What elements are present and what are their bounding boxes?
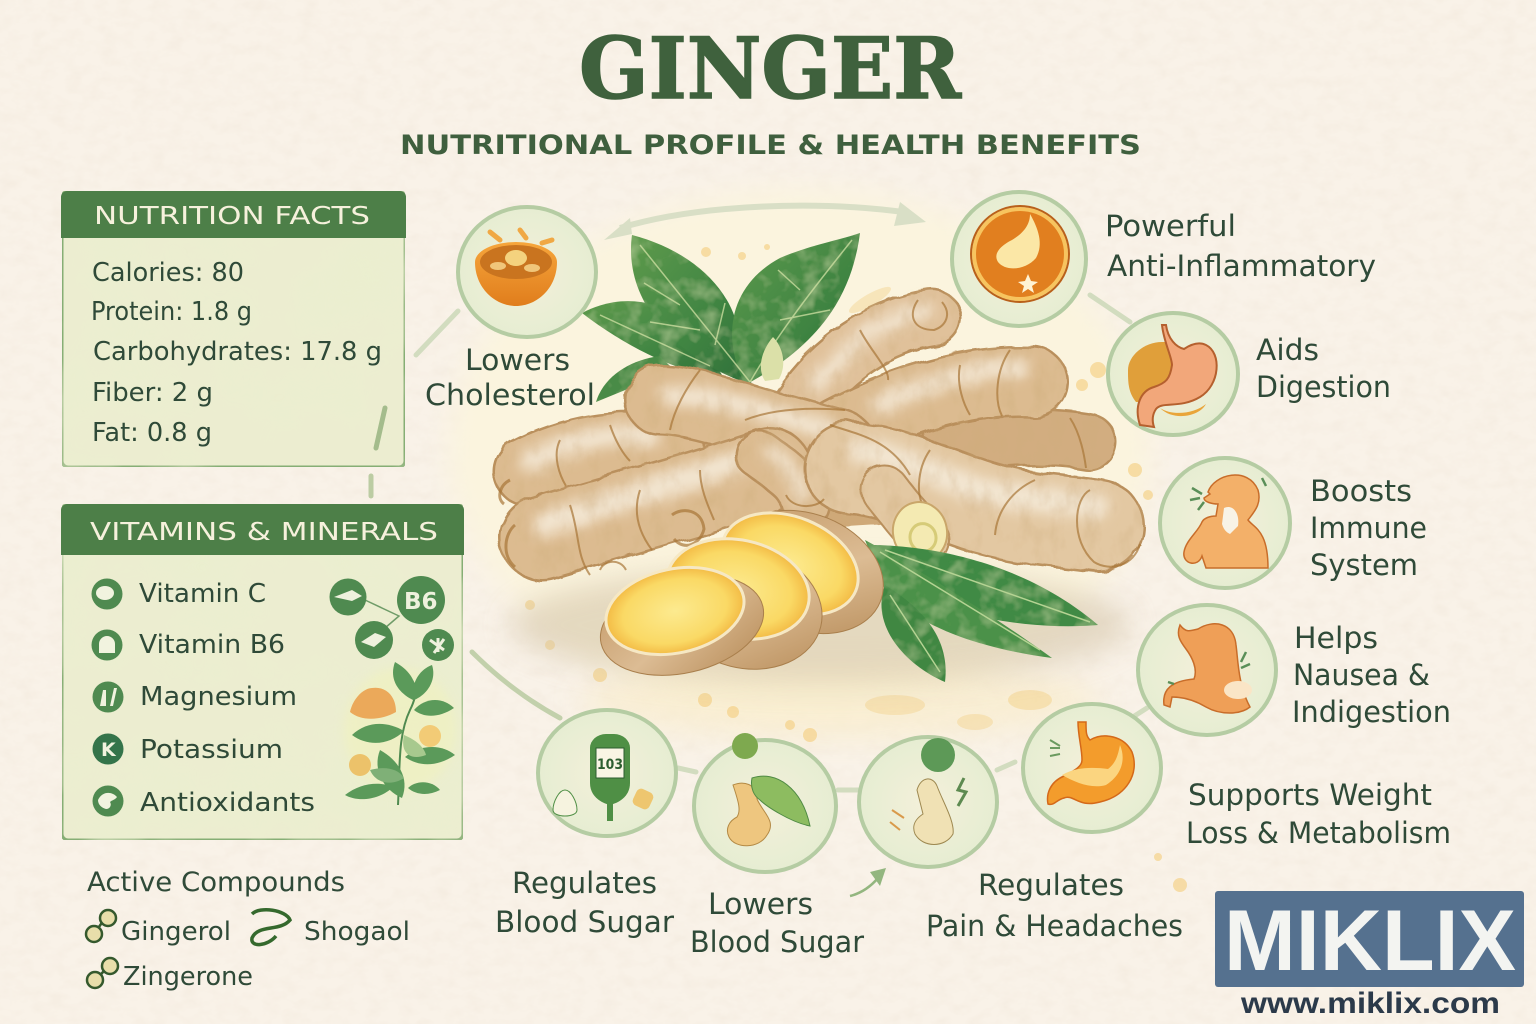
arrow: top arc	[604, 202, 926, 240]
label: Lowers	[708, 887, 813, 921]
nutrition list: Fat: 0.8 g	[92, 418, 212, 448]
ground shadow	[510, 567, 1130, 683]
label: Supports Weight	[1188, 778, 1432, 812]
icon: zingerone molecule	[87, 958, 118, 988]
benefit: pain and headaches	[859, 737, 1183, 943]
vitamin list: Potassium	[140, 735, 283, 765]
label: Lowers	[465, 343, 570, 377]
vitamin list: Vitamin C	[139, 579, 266, 609]
label	[1310, 474, 1427, 582]
sliced ginger	[590, 488, 902, 690]
icon: bowl	[475, 230, 557, 306]
active compounds: Gingerol	[121, 917, 231, 947]
vitamin list: K	[101, 739, 117, 761]
icon: person	[1184, 475, 1268, 568]
label	[1292, 621, 1451, 729]
ginger illustration	[500, 233, 1140, 690]
icon: stomach	[1128, 325, 1217, 427]
active compounds: Zingerone	[123, 962, 253, 992]
icon: gingerol molecule	[86, 910, 116, 942]
icon cluster: B6	[330, 576, 454, 661]
label	[690, 887, 864, 959]
active compounds: Shogaol	[304, 917, 410, 947]
nutrition list	[91, 258, 382, 448]
label: Cholesterol	[425, 378, 595, 412]
icon: leaf and root	[727, 733, 810, 846]
label	[1256, 333, 1391, 404]
benefit: weight loss and metabolism	[1023, 704, 1451, 850]
logo: miklix: MIKLIX	[1224, 893, 1516, 989]
benefit: boosts immune system	[1160, 458, 1427, 588]
vitamin list: Vitamin B6	[139, 630, 285, 660]
connectors	[371, 295, 1147, 790]
label: Helps	[1294, 621, 1378, 655]
root creases	[500, 300, 1140, 575]
label	[1105, 209, 1376, 283]
label: Indigestion	[1292, 695, 1451, 729]
icon: stomach orange	[1048, 722, 1134, 804]
heading: vitamins: VITAMINS & MINERALS	[90, 517, 438, 546]
label	[425, 343, 595, 412]
title: GINGER	[579, 19, 962, 118]
panel: vitamins and minerals	[61, 504, 464, 840]
vitamin list	[92, 578, 315, 818]
benefit: anti-inflammatory	[952, 192, 1376, 326]
benefit: regulates blood sugar	[495, 710, 676, 939]
watercolor wash behind ginger	[450, 190, 1187, 892]
nutrition list: Fiber: 2 g	[92, 378, 213, 408]
panel: nutrition facts	[61, 191, 406, 467]
label	[926, 868, 1183, 943]
vitamin list: Antioxidants	[140, 788, 315, 818]
label: Blood Sugar	[690, 925, 864, 959]
label: System	[1310, 548, 1418, 582]
illustration: ginger plant	[344, 662, 456, 805]
label: Regulates	[512, 866, 657, 900]
heading: nutrition facts: NUTRITION FACTS	[94, 201, 370, 230]
label: Regulates	[978, 868, 1124, 902]
leaves: bottom	[865, 540, 1098, 682]
benefit: lowers cholesterol	[425, 207, 596, 412]
nutrition list: Calories: 80	[92, 258, 244, 288]
subtitle: NUTRITIONAL PROFILE & HEALTH BENEFITS	[400, 130, 1141, 161]
ginger root	[528, 310, 1098, 540]
active compounds	[86, 867, 410, 992]
vitamin list: Magnesium	[140, 682, 297, 712]
label: Powerful	[1105, 209, 1236, 243]
benefit: lowers blood sugar	[690, 733, 864, 959]
icon: torso	[1164, 624, 1252, 713]
label	[495, 866, 674, 939]
label: Immune	[1310, 511, 1427, 545]
benefit: aids digestion	[1108, 313, 1391, 435]
label	[1186, 778, 1451, 850]
nutrition list: Protein: 1.8 g	[91, 297, 252, 327]
label: Aids	[1256, 333, 1319, 367]
label: Pain & Headaches	[926, 909, 1183, 943]
label: Blood Sugar	[495, 905, 674, 939]
nutrition list: Carbohydrates: 17.8 g	[93, 337, 382, 367]
label: Digestion	[1256, 370, 1391, 404]
arrow: bottom	[850, 868, 886, 896]
circle	[458, 207, 596, 337]
icon: glucose meter: 103	[597, 757, 623, 773]
icon: glucose meter	[553, 734, 655, 821]
icon: shogaol molecule	[252, 910, 290, 945]
active compounds: Active Compounds	[87, 867, 345, 898]
label: Anti-Inflammatory	[1107, 249, 1376, 283]
icon: figure	[890, 738, 966, 844]
header bar: vitamins	[61, 504, 464, 555]
icon cluster: B6: B6	[404, 589, 438, 615]
icon: flame coin	[971, 206, 1069, 302]
label: Loss & Metabolism	[1186, 816, 1451, 850]
logo: miklix: www.miklix.com	[1240, 987, 1500, 1020]
label: Boosts	[1310, 474, 1412, 508]
leaves: top	[582, 233, 860, 402]
header bar: nutrition facts	[61, 191, 406, 238]
cut end	[888, 498, 952, 566]
label: Nausea &	[1293, 658, 1430, 692]
benefit: nausea and indigestion	[1138, 605, 1451, 735]
